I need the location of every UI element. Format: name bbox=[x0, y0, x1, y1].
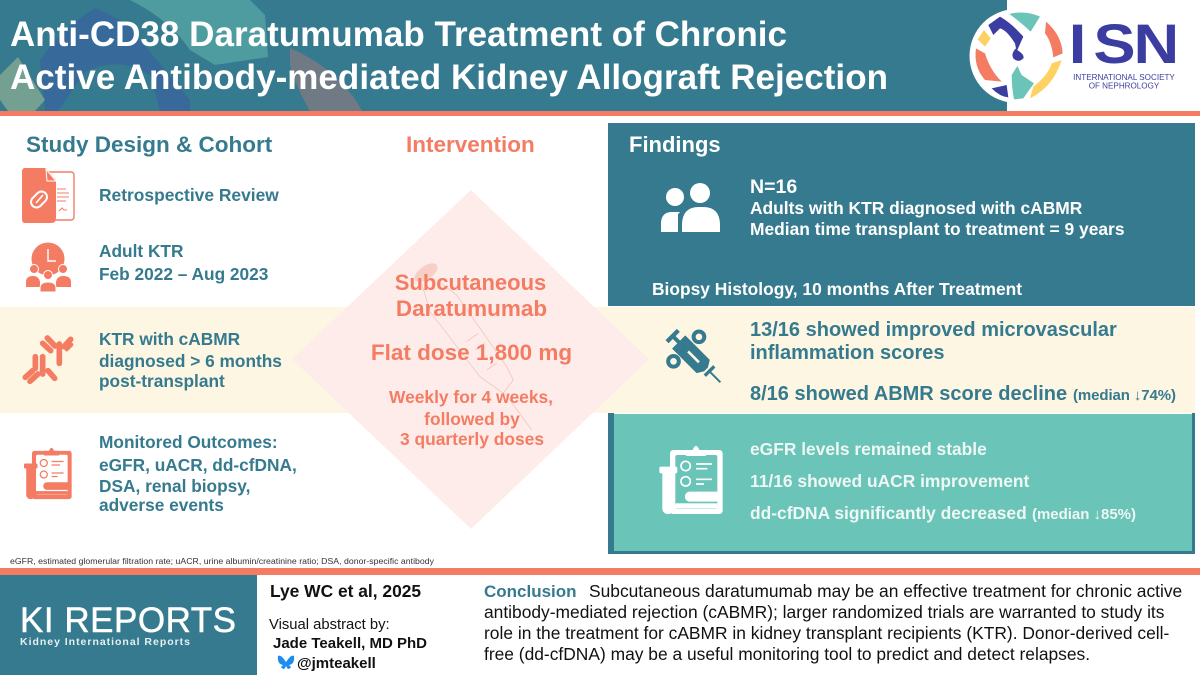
text: monitored outcomes: eGFR, uACR, dd-cfDNA, bbox=[99, 455, 297, 475]
KI Reports logo bbox=[0, 575, 257, 675]
text: adult KTR: Feb 2022 – Aug 2023 bbox=[99, 264, 268, 284]
KI Reports logo: KI REPORTS bbox=[20, 601, 236, 640]
text: lab findings: (median ↓85%) bbox=[1032, 506, 1136, 523]
conclusion: Subcutaneous daratumumab may be an effective treatment for chronic active bbox=[589, 581, 1182, 601]
icon: faint syringe bbox=[411, 260, 532, 430]
footnote: eGFR, estimated glomerular filtration rate; uACR, urine albumin/creatinine ratio; DSA, donor-specific antibody bbox=[10, 556, 435, 566]
panel: intervention diamond bbox=[292, 190, 649, 529]
panel: findings top bbox=[608, 123, 1195, 306]
text: histology findings: (median ↓74%) bbox=[1073, 387, 1176, 404]
text: adult KTR: Adult KTR bbox=[99, 241, 184, 261]
title: Anti-CD38 Daratumumab Treatment of Chronic bbox=[10, 15, 787, 54]
ISN logo: INTERNATIONAL SOCIETY bbox=[1073, 73, 1175, 82]
text: intervention details: followed by bbox=[424, 409, 520, 429]
icon: clipboard coral bbox=[24, 448, 72, 499]
conclusion: free (dd-cfDNA) may be a useful monitoring tool to predict and detect relapses. bbox=[484, 644, 1090, 664]
icon: people bbox=[661, 183, 720, 232]
text: histology findings: 13/16 showed improved microvascular bbox=[750, 319, 1117, 341]
panel border bbox=[608, 413, 1195, 554]
text: cohort findings: N=16 bbox=[750, 176, 797, 198]
conclusion: antibody-mediated rejection (cABMR); larger randomized trials are warranted to study its bbox=[484, 602, 1165, 622]
text: monitored outcomes: Monitored Outcomes: bbox=[99, 432, 278, 452]
text: intervention details: Daratumumab bbox=[396, 296, 547, 321]
title: Active Antibody-mediated Kidney Allograft Rejection bbox=[10, 58, 888, 97]
text: intervention details: Flat dose 1,800 mg bbox=[371, 340, 572, 365]
text: intervention details: Subcutaneous bbox=[395, 270, 546, 295]
text: lab findings: eGFR levels remained stable bbox=[750, 439, 987, 459]
text: intervention details: Weekly for 4 weeks, bbox=[389, 387, 553, 407]
text: cohort findings bbox=[750, 176, 1124, 239]
text: histology findings bbox=[750, 319, 1176, 405]
icon: clipboard white bbox=[659, 446, 723, 514]
text: lab findings: 11/16 showed uACR improvement bbox=[750, 471, 1030, 491]
text: intervention details: 3 quarterly doses bbox=[400, 429, 544, 449]
text: adult KTR bbox=[99, 241, 268, 284]
footer bar bbox=[0, 568, 1200, 575]
icon: butterfly bbox=[278, 656, 294, 669]
text: KTR with cABMR: post-transplant bbox=[99, 371, 225, 391]
text: histology findings: inflammation scores bbox=[750, 342, 945, 364]
text: monitored outcomes: DSA, renal biopsy, bbox=[99, 476, 250, 496]
KI Reports logo: Kidney International Reports bbox=[20, 636, 190, 648]
citation and author: Jade Teakell, MD PhD bbox=[273, 635, 427, 652]
conclusion: Conclusion bbox=[484, 582, 577, 601]
citation and author: Lye WC et al, 2025 bbox=[270, 581, 421, 601]
heading: intervention: Intervention bbox=[406, 132, 535, 157]
text: KTR with cABMR: KTR with cABMR bbox=[99, 329, 241, 349]
ISN logo: ISN bbox=[1069, 12, 1179, 75]
text: monitored outcomes: adverse events bbox=[99, 495, 224, 515]
heading: findings: Findings bbox=[629, 132, 721, 157]
icon: antibodies bbox=[25, 338, 71, 381]
text: retrospective review: Retrospective Review bbox=[99, 185, 279, 205]
text: intervention details bbox=[371, 270, 572, 449]
conclusion: role in the treatment for cABMR in kidney transplant recipients (KTR). Donor-derived cell- bbox=[484, 623, 1169, 643]
icon: syringe bbox=[655, 318, 736, 399]
text: lab findings: dd-cfDNA significantly decreased bbox=[750, 503, 1027, 523]
text: monitored outcomes bbox=[99, 432, 297, 515]
citation and author: Visual abstract by: bbox=[269, 617, 390, 633]
panel: findings bottom bbox=[609, 414, 1194, 552]
text: biopsy heading: Biopsy Histology, 10 months After Treatment bbox=[652, 279, 1022, 299]
title bbox=[10, 15, 888, 97]
conclusion bbox=[484, 581, 1182, 664]
text: lab findings bbox=[750, 439, 1136, 523]
icon: clock and people bbox=[26, 242, 71, 292]
text: cohort findings: Median time transplant to treatment = 9 years bbox=[750, 219, 1124, 239]
icon: document with pill bbox=[22, 168, 74, 223]
ISN logo bbox=[970, 0, 1200, 111]
cream band bbox=[0, 307, 1195, 413]
ISN logo: OF NEPHROLOGY bbox=[1089, 82, 1160, 90]
header banner bbox=[0, 0, 1200, 116]
text: cohort findings: Adults with KTR diagnosed with cABMR bbox=[750, 198, 1083, 218]
text: KTR with cABMR: diagnosed > 6 months bbox=[99, 351, 282, 371]
text: KTR with cABMR bbox=[99, 329, 282, 391]
text: histology findings: 8/16 showed ABMR score decline bbox=[750, 383, 1067, 405]
citation and author: @jmteakell bbox=[297, 655, 376, 672]
heading: study design: Study Design & Cohort bbox=[26, 132, 273, 157]
citation and author bbox=[269, 581, 427, 672]
